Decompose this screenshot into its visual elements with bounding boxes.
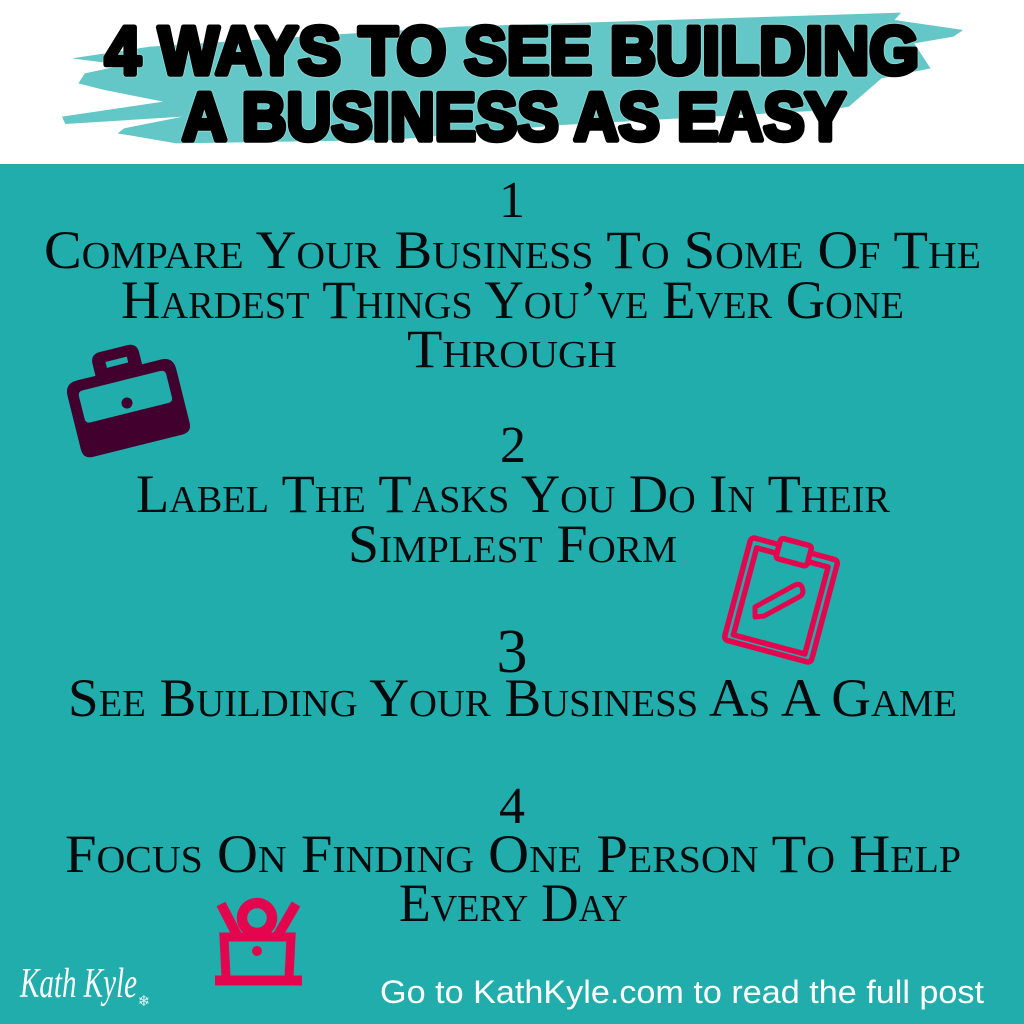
item 1: [44, 172, 981, 379]
item 4: Every Day: [399, 873, 628, 933]
item 1: Through: [407, 319, 617, 379]
item 1: Hardest Things You’ve Ever Gone: [121, 270, 904, 330]
icon: person with laptop: [215, 903, 302, 980]
item 4: 4: [499, 778, 525, 835]
title: A BUSINESS AS EASY: [182, 79, 846, 155]
title: [105, 13, 919, 155]
item 3: [68, 618, 957, 728]
item 1: 1: [499, 172, 525, 229]
item 2: Simplest Form: [348, 514, 677, 574]
title brush stroke: [62, 13, 963, 143]
icon: clipboard with pencil: [724, 530, 840, 663]
item 2: [136, 417, 891, 574]
item 1: Compare Your Business To Some Of The: [44, 220, 981, 280]
item 4: Focus On Finding One Person To Help: [65, 824, 961, 884]
item 4: [65, 778, 961, 933]
item 2: Label The Tasks You Do In Their: [136, 464, 891, 524]
logo: Kath Kyle: Kath Kyle: [19, 961, 137, 1007]
icon: pencil: [755, 584, 803, 617]
logo: Kath Kyle: ❄: [138, 992, 150, 1010]
item 2: 2: [500, 417, 526, 474]
item 3: 3: [496, 618, 528, 686]
item 3: See Building Your Business As A Game: [68, 668, 957, 728]
title: 4 WAYS TO SEE BUILDING: [105, 13, 919, 89]
footer call to action: Go to KathKyle.com to read the full post: [380, 974, 984, 1010]
icon: briefcase: [59, 335, 192, 459]
